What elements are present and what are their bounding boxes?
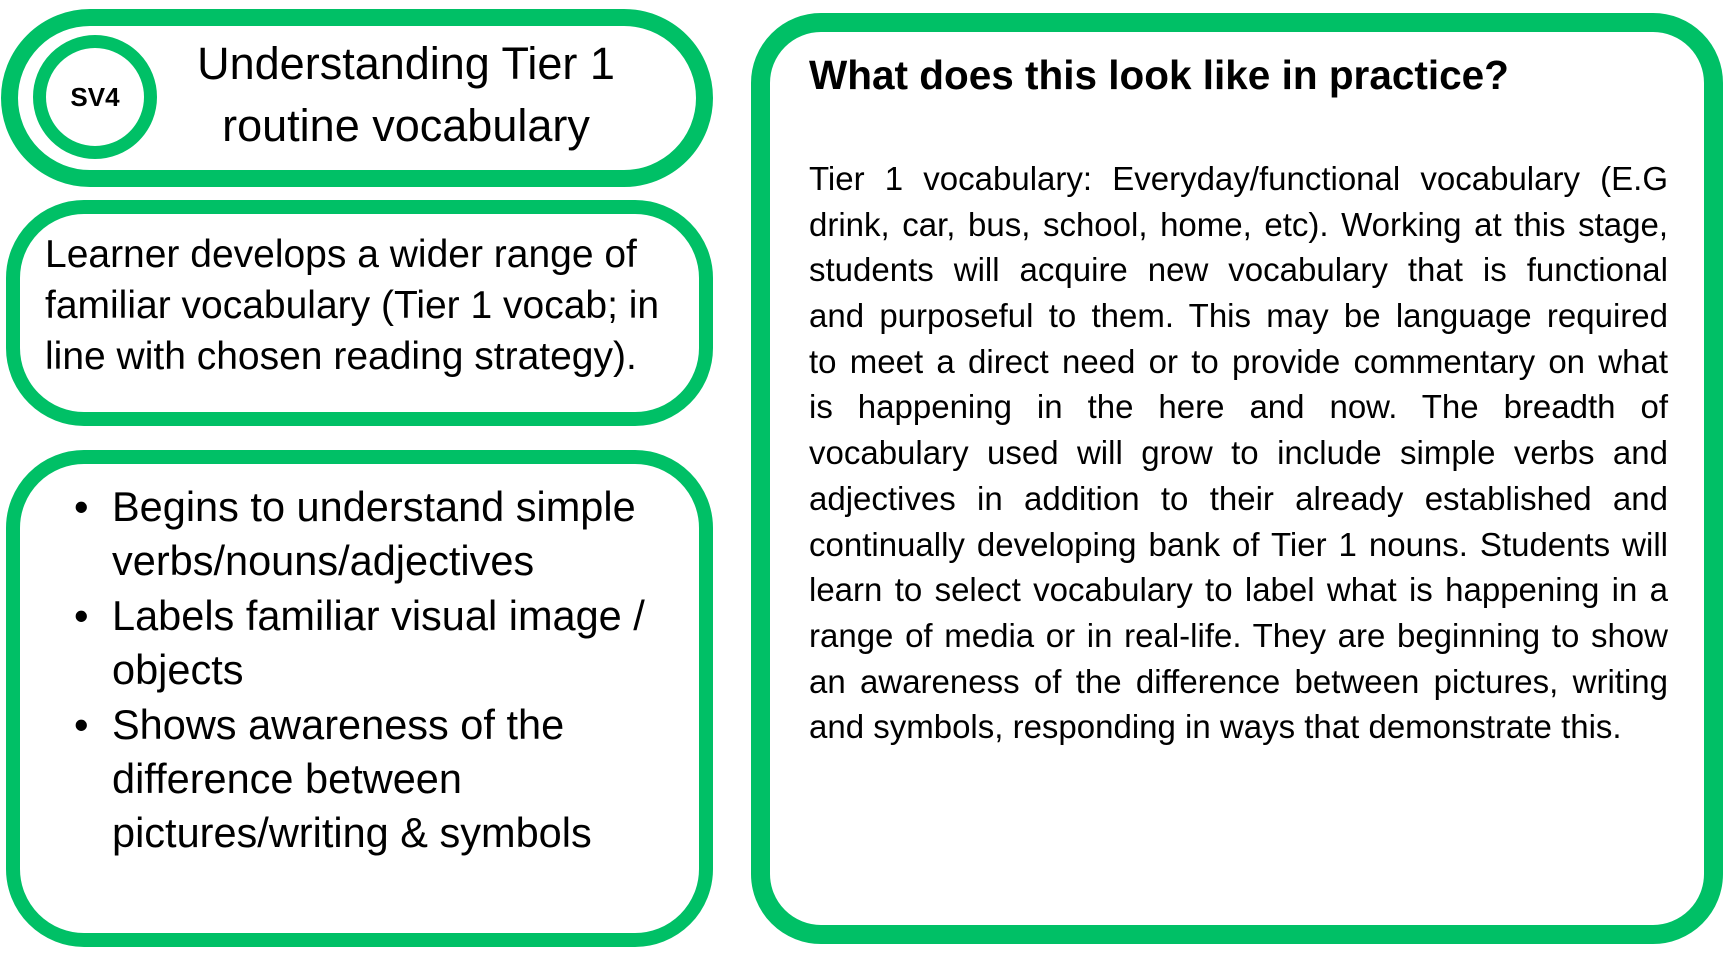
body text: an awareness of the difference between pictures, writing	[809, 663, 1668, 700]
panel: description	[6, 200, 713, 426]
body text: and purposeful to them. This may be language required	[809, 297, 1668, 334]
bullet list: •	[74, 592, 89, 639]
body text: to meet a direct need or to provide commentary on what	[809, 343, 1668, 380]
body text: range of media or in real-life. They are beginning to show	[809, 617, 1668, 654]
body text: learn to select vocabulary to label what is happening in a	[809, 571, 1668, 608]
body text: students will acquire new vocabulary that is functional	[809, 251, 1668, 288]
body text	[809, 160, 1668, 745]
panel: title	[1, 9, 713, 187]
panel: in practice	[751, 13, 1723, 944]
bullet list: difference between	[112, 755, 462, 802]
bullet list: objects	[112, 646, 244, 693]
body text: drink, car, bus, school, home, etc). Working at this stage,	[809, 206, 1668, 243]
icon: SV4 badge: SV4	[70, 82, 120, 112]
bullet list: •	[74, 483, 89, 530]
title text: Understanding Tier 1	[197, 38, 615, 89]
description text: line with chosen reading strategy).	[45, 335, 637, 378]
panel: bullet list	[6, 450, 713, 947]
body text: is happening in the here and now. The breadth of	[809, 388, 1668, 425]
description text: familiar vocabulary (Tier 1 vocab; in	[45, 284, 659, 327]
body text: and symbols, responding in ways that demonstrate this.	[809, 708, 1622, 745]
bullet list: Begins to understand simple	[112, 483, 636, 530]
bullet list: Shows awareness of the	[112, 701, 564, 748]
body text: vocabulary used will grow to include simple verbs and	[809, 434, 1668, 471]
heading: What does this look like in practice?	[809, 52, 1509, 98]
title text: routine vocabulary	[222, 100, 590, 151]
bullet list: Labels familiar visual image /	[112, 592, 645, 639]
bullet list	[74, 483, 645, 856]
bullet list: verbs/nouns/adjectives	[112, 537, 534, 584]
icon: SV4 badge	[33, 35, 157, 159]
description text	[45, 233, 659, 378]
title text	[197, 38, 615, 151]
bullet list: pictures/writing & symbols	[112, 809, 592, 856]
bullet list: •	[74, 701, 89, 748]
body text: adjectives in addition to their already established and	[809, 480, 1668, 517]
description text: Learner develops a wider range of	[45, 233, 637, 276]
body text: Tier 1 vocabulary: Everyday/functional vocabulary (E.G	[809, 160, 1668, 197]
body text: continually developing bank of Tier 1 nouns. Students will	[809, 526, 1668, 562]
